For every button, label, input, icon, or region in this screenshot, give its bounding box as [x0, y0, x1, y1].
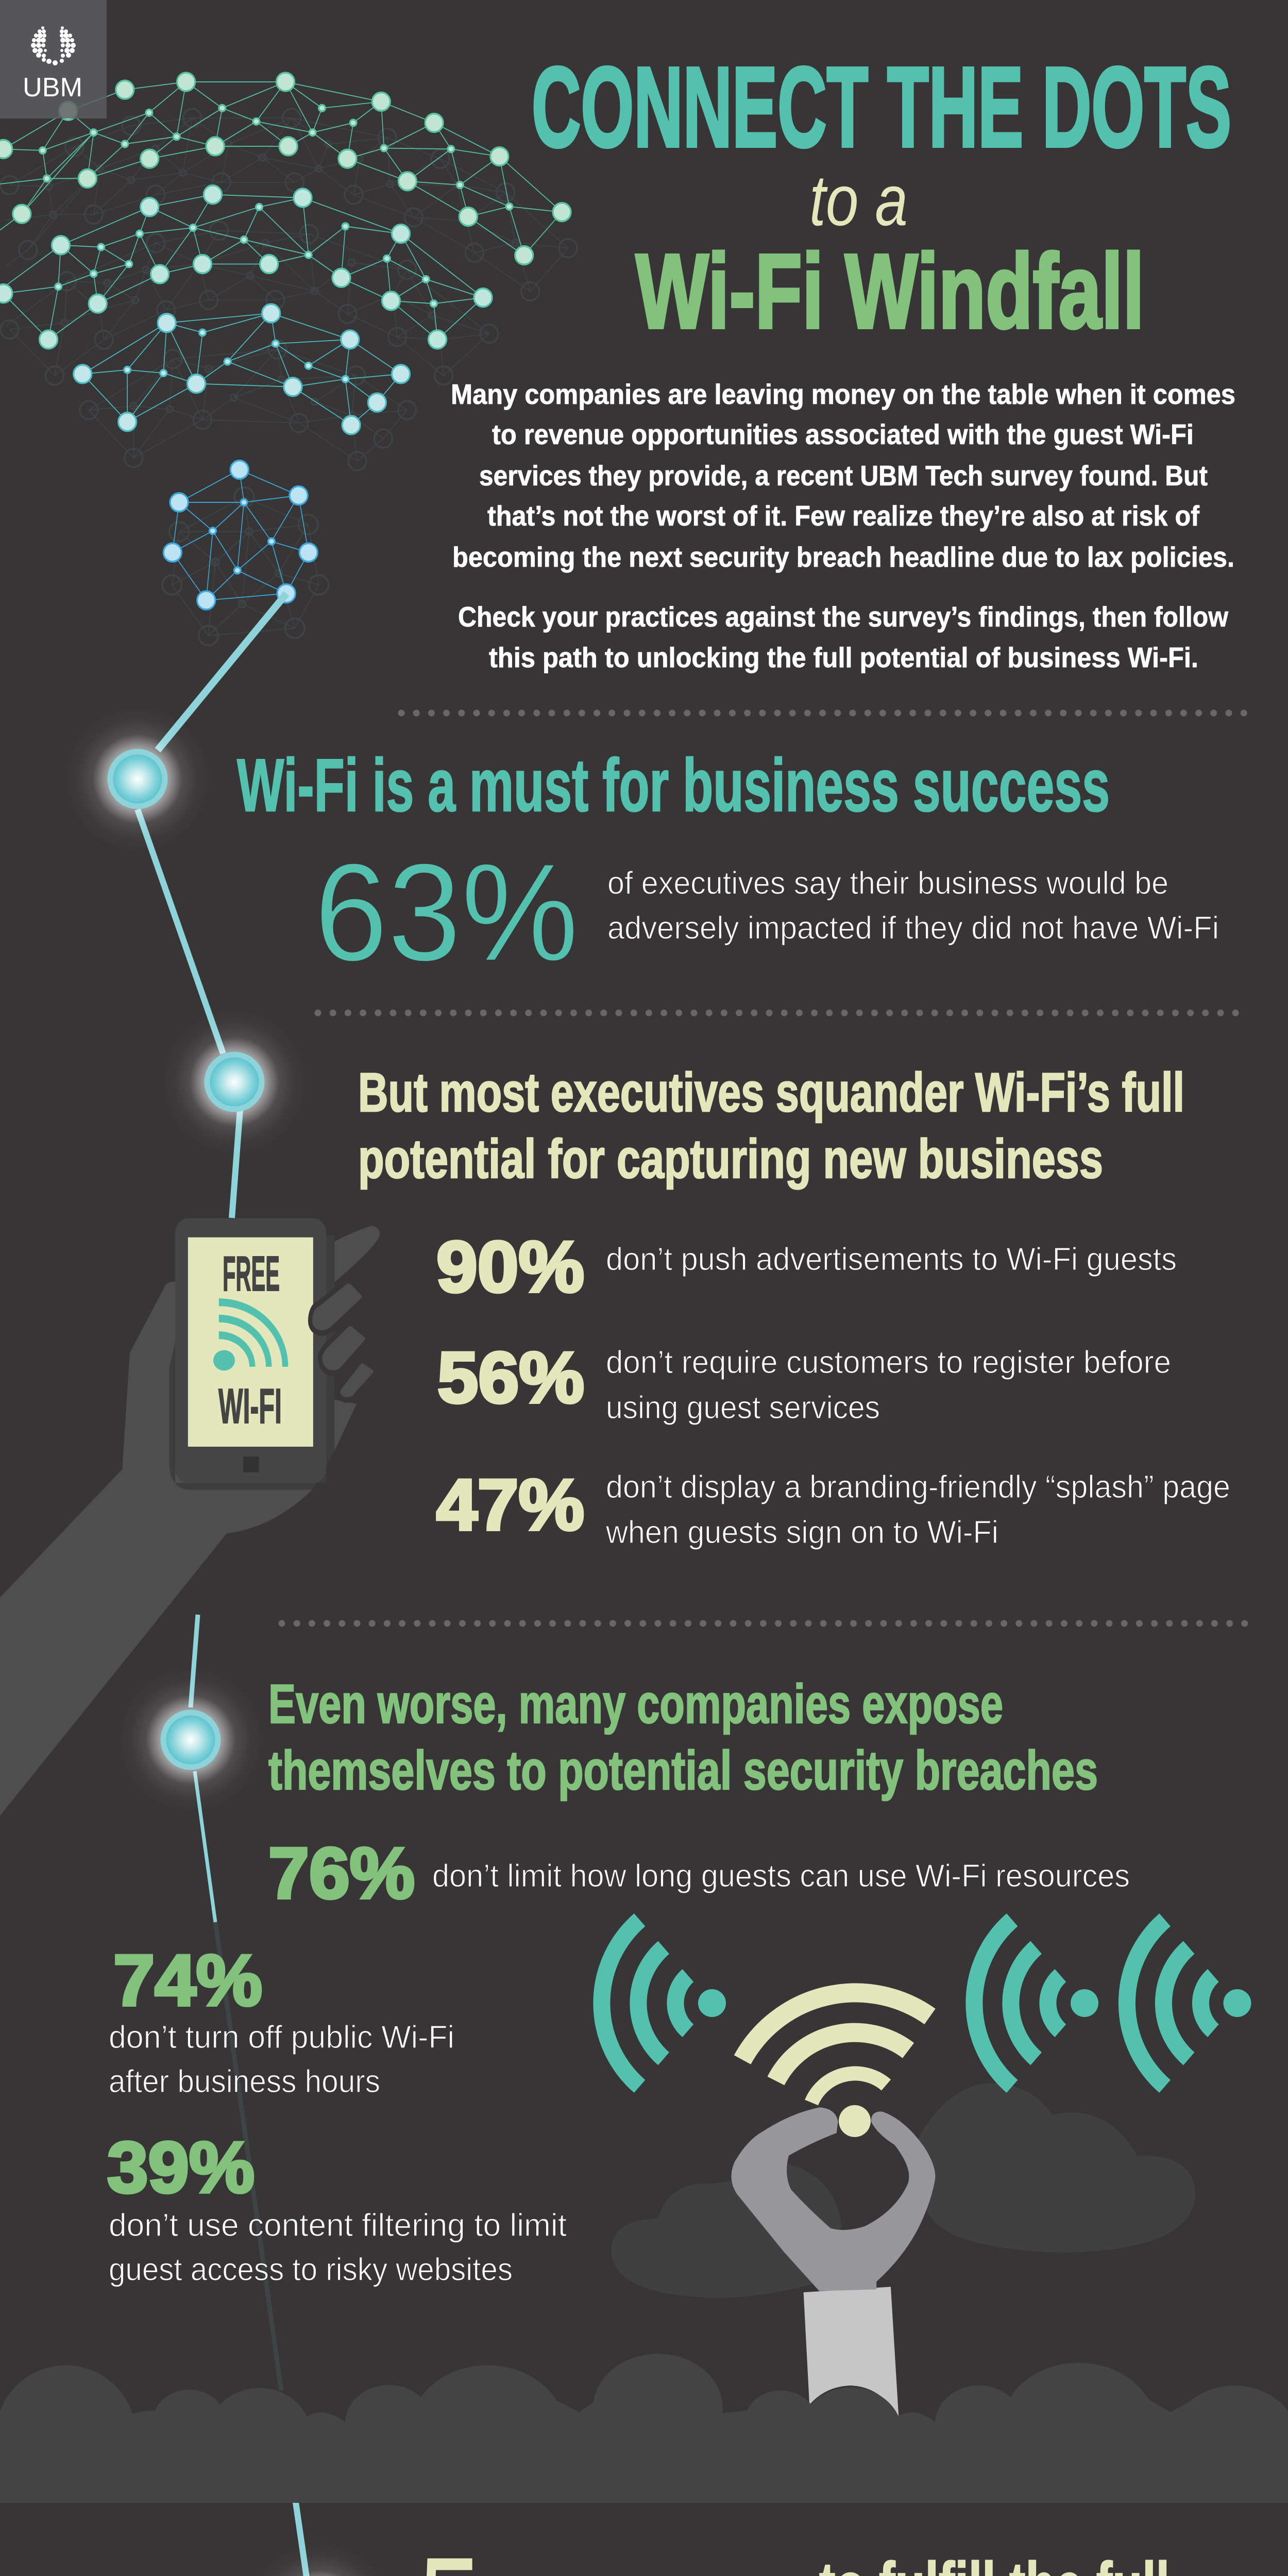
phone screen: [188, 1238, 313, 1447]
network centre cluster: [163, 461, 317, 609]
intro text: becoming the next security breach headline due to lax policies.: [452, 541, 1234, 573]
phone body: [175, 1218, 326, 1483]
sleeve: [804, 2287, 899, 2416]
stat: 90%: 90%: [436, 1226, 584, 1307]
FREE WI-FI labels: [218, 1246, 282, 1434]
icon: UBM dotted U: [31, 26, 76, 65]
stat: 47%: when guests sign on to Wi-Fi: [605, 1515, 998, 1550]
path node 4: [245, 2540, 395, 2576]
stat: 47%: [436, 1464, 1230, 1550]
intro text: that’s not the worst of it. Few realize they’re also at risk of: [487, 500, 1200, 532]
icon: cream wi-fi signal: [742, 1993, 930, 2137]
stat: 56%: 56%: [437, 1337, 584, 1418]
hand holding phone: [0, 1218, 380, 1816]
intro text: to revenue opportunities associated with the guest Wi-Fi: [492, 418, 1194, 450]
arm holding wi-fi signal: [732, 2107, 935, 2416]
stat: 39%: guest access to risky websites: [109, 2252, 513, 2287]
intro text: this path to unlocking the full potential of business Wi-Fi.: [489, 641, 1198, 673]
network ghost shadow: [1, 109, 577, 646]
stat: 90%: [436, 1226, 1177, 1307]
wi-fi network of dots: [0, 73, 571, 609]
phone shadow: [169, 1235, 334, 1490]
stat: 63%: of executives say their business would be: [607, 866, 1168, 901]
stat: 74%: after business hours: [109, 2064, 380, 2099]
stat: 74%: 74%: [113, 1940, 262, 2021]
background clouds: [612, 2083, 1195, 2298]
network arc 1: [0, 73, 571, 264]
title: to a: [809, 160, 908, 241]
cloud band: [0, 2354, 1288, 2503]
stat: 39%: [107, 2127, 567, 2287]
icon: teal wi-fi signal 1: [602, 1920, 726, 2087]
intro text: services they provide, a recent UBM Tech survey found. But: [479, 460, 1208, 492]
icon: screen wi-fi: [213, 1302, 285, 1370]
hand and arm: [0, 1281, 357, 1816]
FREE WI-FI labels: WI-FI: [218, 1379, 282, 1434]
stat: 39%: 39%: [107, 2127, 255, 2208]
path node 1: [63, 704, 212, 854]
stat: 39%: don’t use content filtering to limit: [109, 2208, 567, 2243]
stat: 47%: don’t display a branding-friendly “splash” page: [606, 1469, 1230, 1505]
stat: 74%: don’t turn off public Wi-Fi: [109, 2020, 454, 2055]
UBM wordmark: UBM: [23, 73, 82, 103]
network arc 3: [74, 304, 410, 434]
stat: 56%: [437, 1337, 1171, 1426]
index finger: [334, 1226, 380, 1282]
intro text: Check your practices against the survey’s findings, then follow: [458, 601, 1228, 633]
stat: 90%: don’t push advertisements to Wi-Fi guests: [606, 1242, 1177, 1277]
section heading: security breaches: [268, 1673, 1098, 1801]
stat: 47%: 47%: [436, 1464, 584, 1545]
title: [532, 43, 1231, 350]
home button: [243, 1456, 259, 1472]
stat: 56%: don’t require customers to register before: [606, 1345, 1171, 1380]
stat: 63%: [314, 835, 1219, 990]
connecting path: [138, 594, 308, 2576]
section heading: squander potential: [358, 1061, 1184, 1190]
stat: 76%: [268, 1833, 1130, 1913]
stat: 56%: using guest services: [606, 1390, 880, 1426]
stat: 63%: 63%: [314, 835, 579, 990]
path node 3: [116, 1665, 265, 1815]
UBM logo panel: [0, 0, 107, 118]
intro text: Many companies are leaving money on the table when it comes: [451, 378, 1235, 410]
intro text: [451, 378, 1235, 673]
infographic canvas: FREE: [223, 1246, 280, 1301]
path node 2: [160, 1007, 309, 1157]
network arc 2: [0, 185, 492, 349]
stat: 63%: adversely impacted if they did not have Wi-Fi: [607, 910, 1219, 946]
hand: [732, 2107, 935, 2291]
stat: 76%: don’t limit how long guests can use Wi-Fi resources: [432, 1858, 1130, 1894]
section heading: security breaches: Even worse, many companies expose: [268, 1673, 1003, 1735]
fingers: [310, 1281, 376, 1400]
stat: 76%: 76%: [268, 1833, 415, 1913]
icon: teal wi-fi signal 3: [1127, 1920, 1251, 2087]
stat: 74%: [109, 1940, 454, 2099]
icon: teal wi-fi signal 2: [974, 1920, 1098, 2087]
